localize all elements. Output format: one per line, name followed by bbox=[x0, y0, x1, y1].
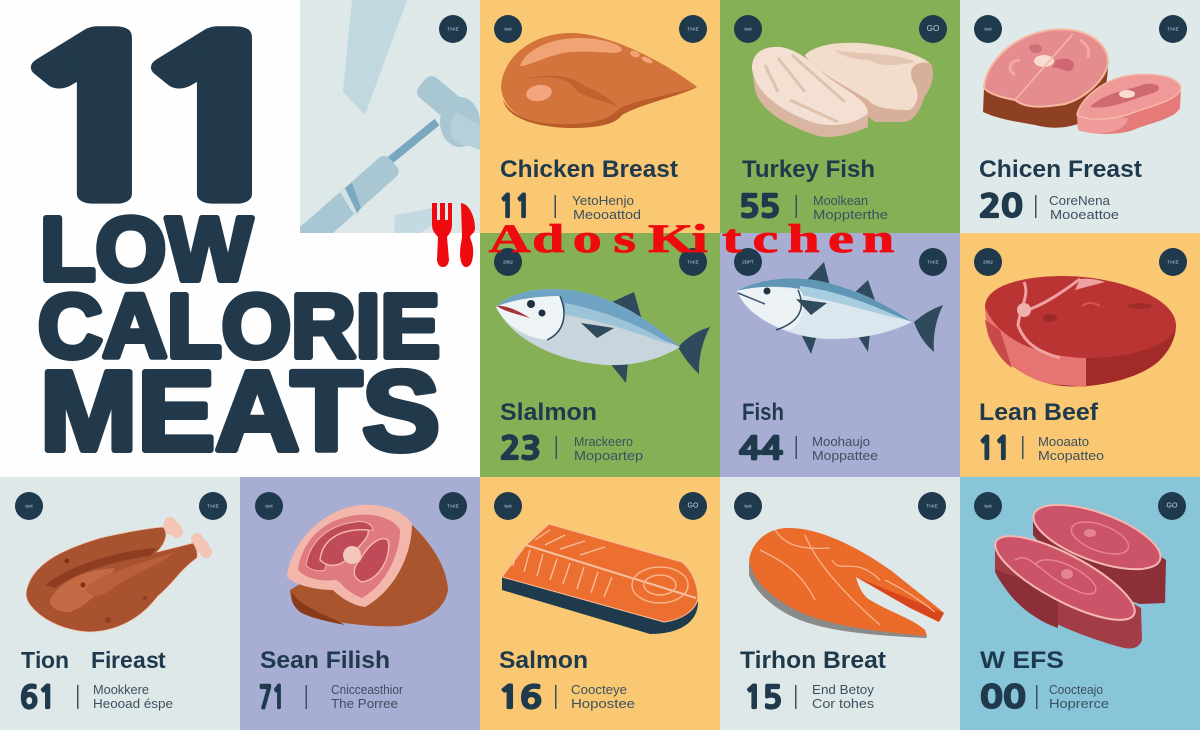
panel: tion fireast bbox=[0, 477, 240, 730]
description: Moohaujo bbox=[812, 435, 870, 449]
icon: fish with red mouth bbox=[496, 289, 710, 383]
icon: knife bbox=[460, 203, 475, 267]
badges bbox=[974, 492, 1186, 520]
description: Mooaato bbox=[1038, 435, 1089, 449]
badges: text bbox=[744, 504, 752, 508]
badges: TAKE bbox=[447, 504, 459, 508]
badges: text bbox=[744, 26, 752, 32]
number: 44 bbox=[739, 433, 783, 464]
heading: Slalmon bbox=[500, 399, 597, 426]
description bbox=[93, 683, 173, 711]
badges: 2662 bbox=[983, 260, 994, 264]
number: 11 bbox=[499, 191, 531, 222]
description bbox=[1049, 194, 1119, 222]
description: Cnicceasthior bbox=[331, 683, 403, 697]
badges: GO bbox=[688, 502, 699, 510]
badges bbox=[734, 248, 947, 276]
badges bbox=[494, 248, 707, 276]
watermark: AdosKitchen: AdosKitchen bbox=[489, 217, 894, 261]
divider bbox=[554, 195, 556, 218]
badges: TAKE bbox=[1167, 26, 1179, 32]
title word MEATS: MEATS bbox=[40, 348, 440, 474]
icon: pork steaks bbox=[983, 29, 1181, 134]
heading: W EFS bbox=[980, 647, 1064, 674]
description bbox=[571, 683, 635, 711]
badge: TAKE bbox=[447, 26, 459, 32]
description bbox=[572, 194, 641, 222]
description: Moppterthe bbox=[813, 208, 888, 222]
badges: text bbox=[504, 26, 512, 32]
panel: w efs bbox=[960, 477, 1200, 730]
badges bbox=[494, 492, 707, 520]
panel: slalmon bbox=[480, 233, 720, 477]
badges: TAKE bbox=[687, 26, 699, 32]
panel: lean beef bbox=[960, 233, 1200, 477]
title number 11: 11 bbox=[0, 16, 314, 228]
panel: turkey fish bbox=[720, 0, 960, 233]
icon: salmon fillet bbox=[502, 524, 698, 634]
heading: TionFireast bbox=[21, 647, 166, 673]
description bbox=[812, 435, 878, 463]
description: Mookkere bbox=[93, 683, 149, 697]
panel: tirhon breat bbox=[720, 477, 960, 730]
logo: fork and knife bbox=[432, 203, 475, 267]
divider bbox=[1035, 195, 1036, 218]
badges: text bbox=[504, 504, 512, 508]
divider bbox=[306, 685, 307, 709]
panel: sean filish bbox=[240, 477, 480, 730]
badges bbox=[974, 248, 1187, 276]
description: Hoprerce bbox=[1049, 697, 1109, 711]
icon: meat tenderizer bbox=[300, 73, 480, 233]
description: YetoHenjo bbox=[572, 194, 634, 208]
badges: GO bbox=[1167, 502, 1178, 510]
badges: text bbox=[25, 504, 33, 508]
panel: kitchen tool bbox=[300, 0, 480, 233]
divider bbox=[556, 436, 557, 459]
panel: salmon bbox=[480, 477, 720, 730]
heading: Chicken Breast bbox=[500, 156, 678, 183]
lower wedge shape bbox=[394, 208, 432, 233]
icon: turkey slices bbox=[752, 43, 933, 137]
panel: fish bbox=[720, 233, 960, 477]
icon: ham bbox=[287, 505, 448, 626]
badges bbox=[255, 492, 467, 520]
description bbox=[331, 683, 403, 711]
number: 20 bbox=[979, 191, 1023, 222]
heading: Fish bbox=[742, 399, 784, 426]
heading: Turkey Fish bbox=[742, 156, 875, 183]
heading: Lean Beef bbox=[979, 399, 1099, 426]
description: Moolkean bbox=[813, 194, 868, 208]
title block bbox=[0, 16, 440, 474]
heading: Tirhon Breat bbox=[740, 647, 886, 674]
divider bbox=[555, 685, 556, 709]
number: 55 bbox=[739, 191, 780, 222]
description: Mrackeero bbox=[574, 435, 633, 449]
badges: TAKE bbox=[927, 260, 939, 264]
badges: text bbox=[984, 26, 992, 32]
icon: chicken drumsticks bbox=[26, 517, 212, 632]
description bbox=[1049, 683, 1109, 711]
number: 61 bbox=[20, 682, 56, 713]
title word CALORIE: CALORIE bbox=[38, 277, 440, 377]
badges bbox=[494, 15, 707, 43]
description: Cor tohes bbox=[812, 697, 874, 711]
badges bbox=[734, 15, 947, 43]
description: The Porree bbox=[331, 697, 398, 711]
divider bbox=[77, 685, 78, 709]
badges: TAKE bbox=[687, 260, 699, 264]
divider bbox=[796, 436, 797, 459]
description bbox=[812, 683, 875, 711]
icon: fork bbox=[432, 203, 452, 267]
badges: TAKE bbox=[207, 504, 219, 508]
icon: tuna steaks bbox=[985, 492, 1168, 648]
panel: chicken breast bbox=[480, 0, 720, 233]
description: Mopoartep bbox=[574, 449, 643, 463]
description: Mooeattoe bbox=[1050, 208, 1119, 222]
description: Heooad éspe bbox=[93, 697, 173, 711]
icon: chicken breast bbox=[501, 33, 697, 128]
panel: chicen freast bbox=[960, 0, 1200, 233]
divider bbox=[795, 685, 796, 709]
divider bbox=[1036, 685, 1038, 709]
heading: Chicen Freast bbox=[979, 156, 1142, 183]
badges: TAKE bbox=[926, 504, 938, 508]
badges: text bbox=[265, 504, 273, 508]
description bbox=[813, 194, 888, 222]
description: Hopostee bbox=[571, 697, 635, 711]
badges: 2062 bbox=[503, 260, 514, 264]
number: 16 bbox=[498, 682, 542, 713]
number: 15 bbox=[744, 682, 782, 713]
badges bbox=[974, 15, 1187, 43]
heading: Sean Filish bbox=[260, 647, 390, 674]
number: 71 bbox=[259, 682, 285, 713]
description: Coocteye bbox=[571, 683, 627, 697]
light wedge shape bbox=[343, 0, 407, 115]
title word LOW: LOW bbox=[40, 200, 252, 300]
badges: text bbox=[984, 504, 992, 508]
badge bbox=[439, 15, 467, 43]
divider bbox=[1022, 436, 1024, 459]
description: Mcopatteo bbox=[1038, 449, 1104, 463]
badges bbox=[15, 492, 227, 520]
badges: GO bbox=[927, 24, 939, 33]
badges: 2DPT bbox=[742, 260, 754, 264]
description: CoreNena bbox=[1049, 194, 1110, 208]
icon: blue fish bbox=[737, 262, 943, 354]
number: 00 bbox=[980, 682, 1026, 713]
divider bbox=[796, 195, 797, 218]
number: 23 bbox=[500, 433, 541, 464]
description: Meooattod bbox=[573, 208, 641, 222]
description: End Betoy bbox=[812, 683, 875, 697]
description bbox=[574, 435, 643, 463]
description: Coocteajo bbox=[1049, 683, 1103, 697]
icon: salmon steak bbox=[749, 528, 944, 638]
description bbox=[1038, 435, 1104, 463]
number: 11 bbox=[978, 433, 1011, 464]
badges bbox=[734, 492, 946, 520]
heading: Salmon bbox=[499, 647, 588, 674]
description: Moppattee bbox=[812, 449, 878, 463]
icon: beef steak bbox=[985, 276, 1176, 387]
badges: TAKE bbox=[1167, 260, 1179, 264]
